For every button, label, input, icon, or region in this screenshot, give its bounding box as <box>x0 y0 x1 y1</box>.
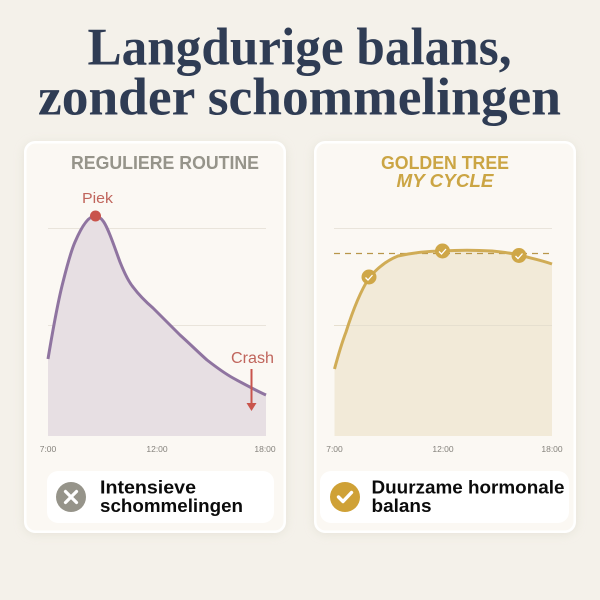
x axis labels: 12:00 <box>146 444 168 454</box>
heading: golden tree my cycle <box>381 153 509 191</box>
x axis labels <box>40 444 276 454</box>
icon: cross <box>56 482 86 512</box>
chart: hormone curve with peak and crash <box>40 190 276 454</box>
check marker 1 <box>362 270 376 284</box>
peak label: Piek <box>82 190 114 207</box>
badge text: schommelingen <box>100 496 243 516</box>
title <box>38 18 561 126</box>
panel: golden tree my cycle <box>314 141 576 534</box>
x axis labels <box>326 444 563 454</box>
heading: golden tree my cycle: MY CYCLE <box>396 171 495 191</box>
badge: intensieve schommelingen <box>47 471 274 523</box>
badge text: Duurzame hormonale <box>372 478 564 498</box>
badge text: Intensieve <box>100 478 196 498</box>
x axis labels: 18:00 <box>254 444 276 454</box>
crash label: Crash <box>231 350 274 367</box>
panel: reguliere routine <box>24 141 286 534</box>
target dashed line <box>334 252 554 254</box>
x axis labels: 7:00 <box>326 444 343 454</box>
crash arrow <box>246 369 256 411</box>
x axis labels: 18:00 <box>541 444 563 454</box>
heading: reguliere routine: REGULIERE ROUTINE <box>71 153 259 173</box>
badge text: balans <box>372 496 432 516</box>
peak marker <box>90 210 101 222</box>
check marker 2 <box>435 244 450 258</box>
check marker 3 <box>512 248 526 263</box>
badge: duurzame hormonale balans <box>320 471 569 523</box>
title: zonder schommelingen <box>38 68 561 126</box>
title: Langdurige balans, <box>88 18 512 76</box>
chart: stable balance curve <box>326 228 563 454</box>
x axis labels: 12:00 <box>432 444 454 454</box>
icon: check <box>330 482 360 512</box>
x axis labels: 7:00 <box>40 444 57 454</box>
heading: golden tree my cycle: GOLDEN TREE <box>381 153 509 173</box>
